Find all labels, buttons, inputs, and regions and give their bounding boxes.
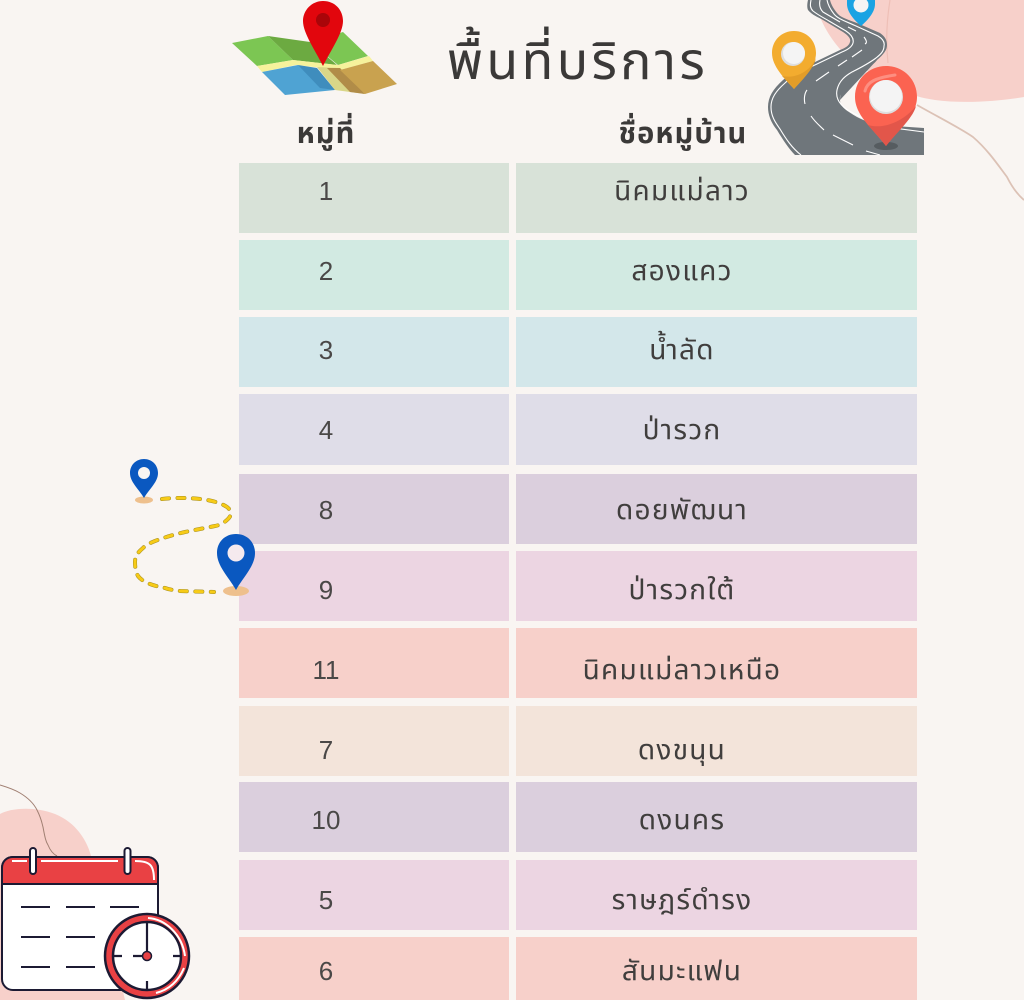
row 3: น้ำลัด bbox=[649, 334, 715, 365]
icon: folded map with red pin bbox=[232, 0, 398, 96]
row 3 bbox=[239, 317, 917, 387]
row 5 bbox=[239, 860, 917, 930]
row 9 bbox=[239, 551, 917, 621]
row 1 bbox=[239, 163, 917, 233]
row 1: 1 bbox=[319, 176, 333, 206]
row 10 bbox=[239, 782, 917, 852]
row 4 bbox=[239, 394, 917, 465]
icon: blue pin bbox=[847, 0, 875, 26]
row 7 bbox=[239, 706, 917, 776]
row 7: ดงขนุน bbox=[638, 734, 726, 765]
row 11: 11 bbox=[312, 655, 340, 685]
row 11: นิคมแม่ลาวเหนือ bbox=[583, 654, 781, 685]
row 10: 10 bbox=[312, 805, 340, 835]
row 1: นิคมแม่ลาว bbox=[614, 175, 750, 206]
row 9: 9 bbox=[319, 575, 333, 605]
icon: red pin bbox=[855, 66, 917, 150]
row 7: 7 bbox=[319, 735, 333, 765]
row 8: 8 bbox=[319, 495, 333, 525]
row 2 bbox=[239, 240, 917, 310]
row 3: 3 bbox=[319, 335, 333, 365]
row 4: ป่ารวก bbox=[643, 414, 721, 445]
row 6: 6 bbox=[319, 956, 333, 986]
row 2: สองแคว bbox=[631, 255, 733, 286]
icon: winding road with location pins bbox=[767, 0, 925, 156]
title: พื้นที่บริการ bbox=[447, 33, 708, 91]
icon: route with two blue pins bbox=[130, 459, 256, 597]
column header: หมู่ที่: หมู่ที่ bbox=[297, 118, 355, 150]
row 2: 2 bbox=[319, 256, 333, 286]
row 9: ป่ารวกใต้ bbox=[629, 574, 735, 605]
row 11 bbox=[239, 628, 917, 698]
icon: orange pin bbox=[772, 31, 816, 89]
row 6 bbox=[239, 937, 917, 1000]
row 5: ราษฎร์ดำรง bbox=[612, 884, 752, 915]
row 4: 4 bbox=[319, 415, 333, 445]
column header: ชื่อหมู่บ้าน: ชื่อหมู่บ้าน bbox=[619, 118, 747, 150]
row 8 bbox=[239, 474, 917, 544]
row 5: 5 bbox=[319, 885, 333, 915]
row 6: สันมะแฟน bbox=[622, 955, 742, 986]
icon: calendar with clock bbox=[0, 846, 192, 1000]
row 8: ดอยพัฒนา bbox=[616, 494, 748, 525]
row 10: ดงนคร bbox=[639, 804, 725, 835]
